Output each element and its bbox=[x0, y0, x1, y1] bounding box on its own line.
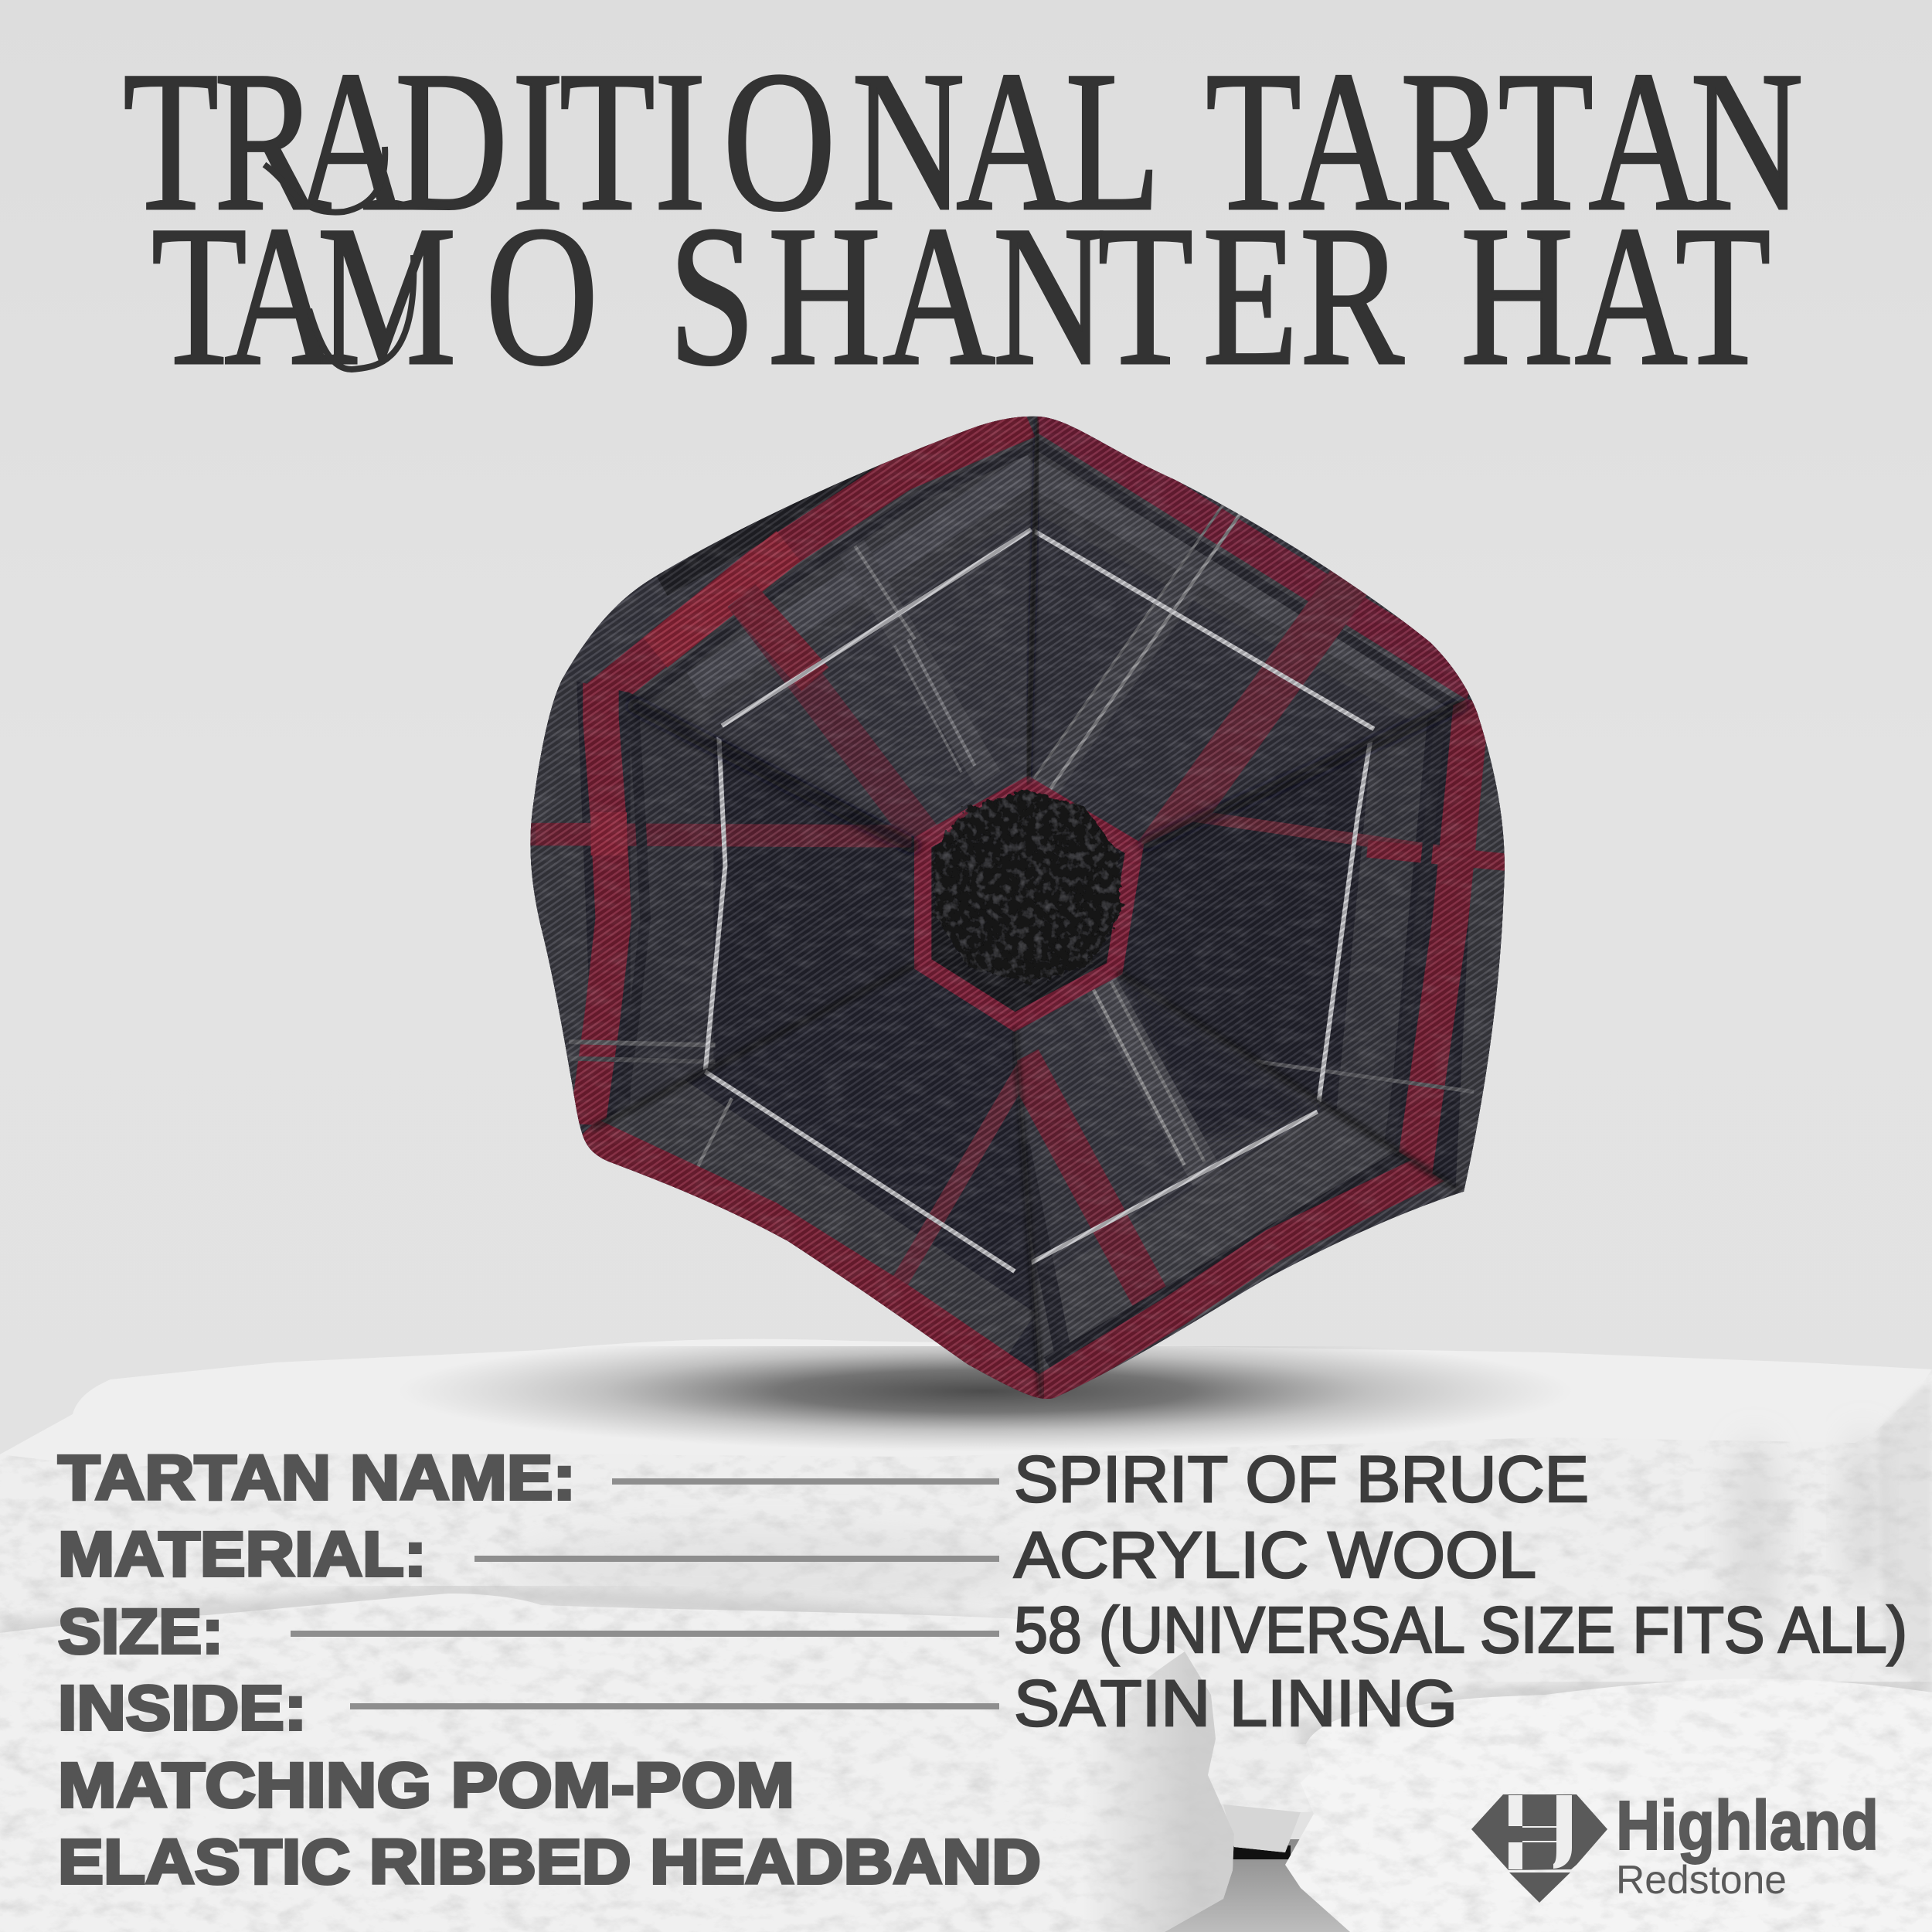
spec values: SATIN LINING bbox=[1014, 1667, 1458, 1740]
title bbox=[123, 30, 1804, 407]
spec labels: SIZE: bbox=[58, 1597, 223, 1667]
panel: bottom left bbox=[583, 972, 1041, 1399]
icon: diamond HJ mark bbox=[1471, 1794, 1607, 1903]
panel: top right bbox=[1032, 416, 1468, 844]
seams and folds between panels bbox=[592, 420, 1467, 1398]
hat: tartan tam o shanter bbox=[530, 416, 1505, 1399]
spec values: ACRYLIC WOOL bbox=[1014, 1519, 1536, 1591]
panel: right bbox=[1124, 699, 1505, 1192]
icon: black pom-pom bbox=[934, 790, 1122, 984]
panel: left bbox=[530, 679, 914, 1125]
logo: Highland Redstone bbox=[1471, 1787, 1879, 1903]
title: TRADITIONAL TARTAN bbox=[123, 30, 1804, 253]
spec values bbox=[1014, 1443, 1907, 1740]
spec values: SPIRIT OF BRUCE bbox=[1014, 1443, 1589, 1515]
twill weave texture bbox=[530, 417, 1505, 1399]
spec labels bbox=[58, 1443, 1041, 1897]
panel: bottom right bbox=[1017, 978, 1461, 1399]
spec labels: INSIDE: bbox=[58, 1673, 307, 1743]
spec labels: ELASTIC RIBBED HEADBAND bbox=[58, 1827, 1041, 1897]
rock: lower right block bbox=[1285, 1679, 1932, 1932]
hat shadow bbox=[398, 1346, 1573, 1461]
spec labels: MATCHING POM-POM bbox=[58, 1750, 794, 1821]
ground between rocks bbox=[1144, 1839, 1391, 1932]
panel: top left bbox=[560, 416, 1037, 837]
connector lines bbox=[291, 1478, 999, 1709]
spec labels: TARTAN NAME: bbox=[58, 1443, 576, 1513]
rock top surface and face shading bbox=[0, 1339, 1932, 1852]
logo wordmark bbox=[1616, 1787, 1879, 1903]
rock: lower left right-hand face bbox=[1082, 1651, 1234, 1932]
spec labels: MATERIAL: bbox=[58, 1519, 427, 1590]
logo wordmark: Highland bbox=[1616, 1787, 1879, 1865]
logo wordmark: Redstone bbox=[1616, 1858, 1787, 1903]
rock: lower left block bbox=[0, 1594, 1234, 1932]
rock: large back plinth bbox=[0, 1339, 1932, 1852]
inner red hexagon bbox=[923, 786, 1134, 1022]
title: TAM O SHANTER HAT bbox=[151, 185, 1770, 407]
heather mottling bbox=[530, 425, 1504, 1396]
